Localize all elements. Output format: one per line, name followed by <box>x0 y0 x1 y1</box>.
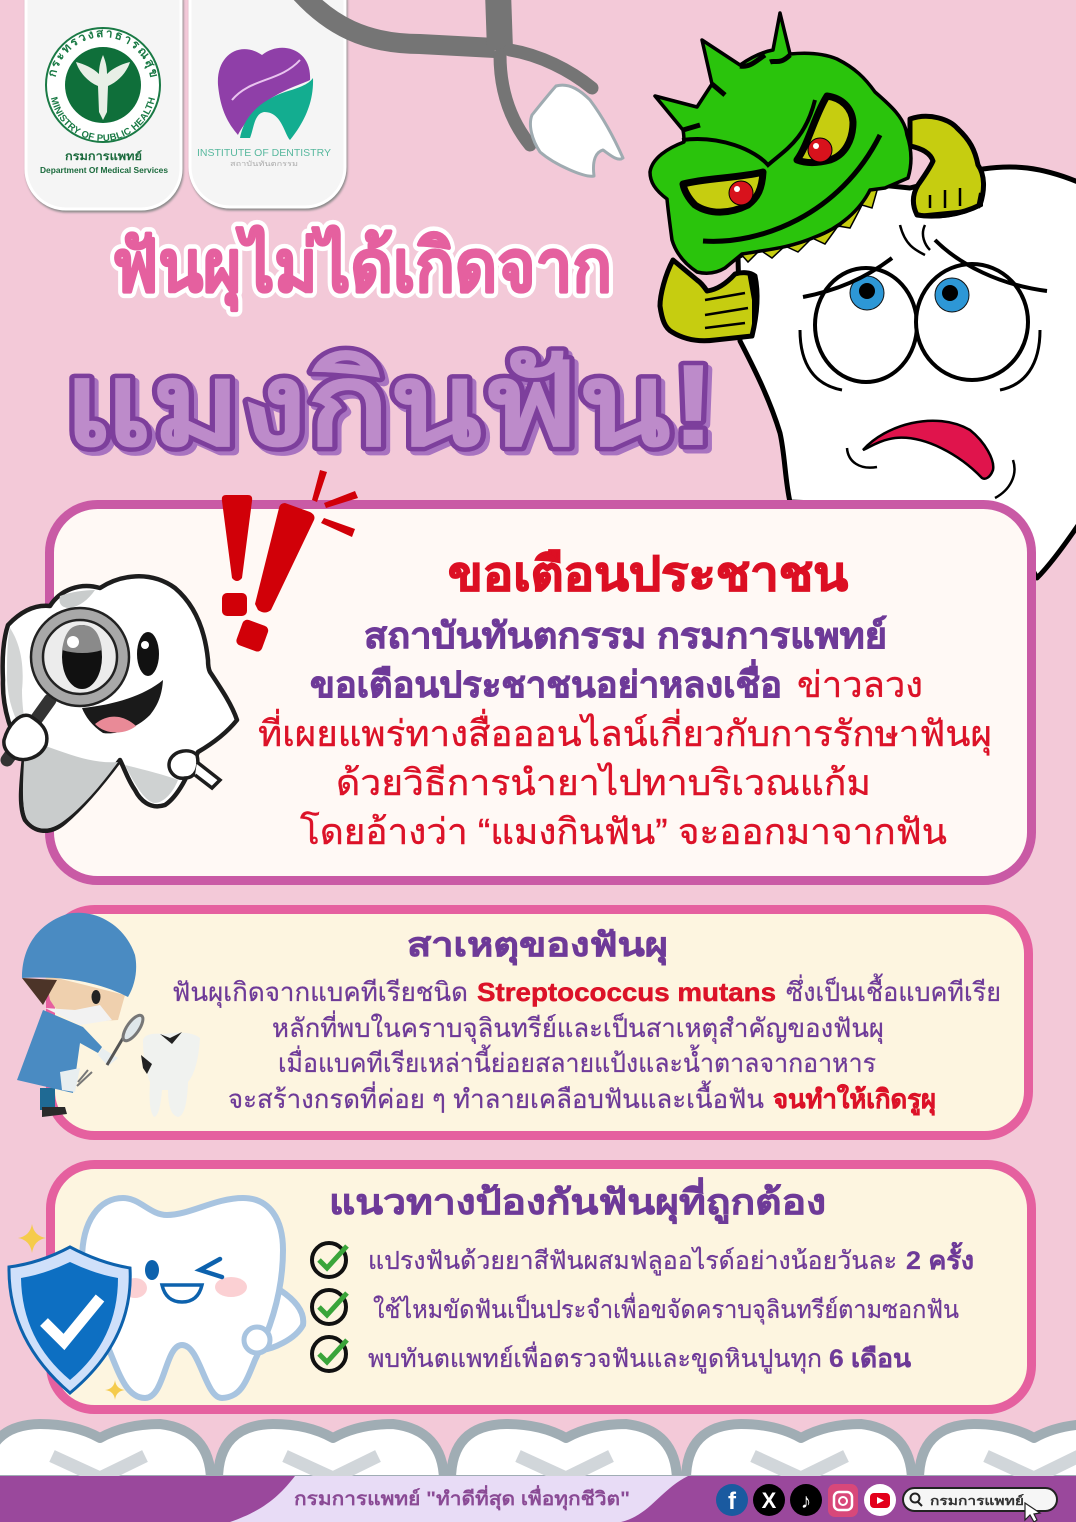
cause text block: ฟันผุเกิดจากแบคทีเรียชนิด <box>172 977 468 1008</box>
panel: prevention <box>50 1164 1032 1410</box>
panel: public warning <box>50 504 1032 880</box>
warning text block: ข่าวลวง <box>797 664 923 705</box>
list: prevention items <box>312 1241 974 1374</box>
cause text block: Streptococcus mutans <box>477 977 776 1007</box>
cause text block: ซึ่งเป็นเชื้อแบคทีเรีย <box>786 973 1001 1007</box>
social icons: f <box>728 1488 737 1515</box>
warning text block: สถาบันทันตกรรม กรมการแพทย์ <box>364 615 887 656</box>
icon: sparkle small <box>105 1380 125 1400</box>
heading: cause: สาเหตุของฟันผุ <box>407 926 668 966</box>
title line 1: ฟันผุไม่ได้เกิดจาก <box>112 224 612 312</box>
cause text block <box>172 973 1001 1116</box>
title line 2 with shadow: แมงกินฟัน! <box>68 344 720 474</box>
list: prevention items: แปรงฟันด้วยยาสีฟันผสมฟลูออไรด์อย่างน้อยวันละ <box>368 1246 897 1276</box>
logo card: Department of Medical Services: กระทรวงสาธารณสุข <box>49 30 158 78</box>
illustration: worried tooth <box>738 167 1076 578</box>
title line 2 with shadow: แมงกินฟัน! <box>64 340 716 470</box>
heading: warning: ขอเตือนประชาชน <box>448 547 848 600</box>
illustration: winking tooth with shield <box>9 1198 303 1398</box>
panel: cause of cavities <box>50 910 1028 1136</box>
illustration: tooth with magnifying glass <box>3 576 237 831</box>
search box: กรมการแพทย์ <box>930 1494 1024 1508</box>
logo card: Department of Medical Services: กรมการแพทย์ <box>65 150 142 163</box>
icon: sparkle large <box>18 1224 46 1253</box>
list: prevention items: 2 ครั้ง <box>906 1241 974 1275</box>
social icons: X <box>762 1488 777 1513</box>
decorative tooth strip <box>0 1424 1076 1480</box>
icon: forceps pulling tooth <box>300 0 623 176</box>
warning text block: ที่เผยแพร่ทางสื่อออนไลน์เกี่ยวกับการรักษาฟันผุ <box>258 709 992 756</box>
cause text block: จนทำให้เกิดรูผุ <box>773 1084 936 1116</box>
icon: check 1 <box>312 1243 347 1277</box>
social icons: ♪ <box>801 1490 811 1513</box>
search box <box>903 1488 1057 1522</box>
warning text block: ด้วยวิธีการนำยาไปทาบริเวณแก้ม <box>336 762 871 803</box>
list: prevention items: พบทันตแพทย์เพื่อตรวจฟันและขูดหินปูนทุก <box>368 1341 822 1374</box>
illustration: dentist examining decayed tooth <box>17 913 200 1117</box>
icon: red exclamation marks <box>222 470 358 653</box>
footer slogan: กรมการแพทย์ "ทำดีที่สุด เพื่อทุกชีวิต" <box>294 1485 630 1511</box>
heading: prevention: แนวทางป้องกันฟันผุที่ถูกต้อง <box>329 1177 826 1224</box>
list: prevention items: 6 เดือน <box>829 1345 911 1373</box>
footer bar <box>0 1476 1076 1522</box>
icon: check 3 <box>312 1337 347 1371</box>
social icons <box>716 1484 896 1517</box>
logo card: Department of Medical Services: MINISTRY OF PUBLIC HEALTH <box>50 96 155 141</box>
list: prevention items: ใช้ไหมขัดฟันเป็นประจำเพื่อขจัดคราบจุลินทรีย์ตามซอกฟัน <box>373 1292 959 1325</box>
title line 1: ฟันผุไม่ได้เกิดจาก <box>112 224 612 312</box>
illustration: green cavity monster <box>650 13 984 341</box>
warning text block <box>258 615 992 852</box>
title line 2 with shadow: แมงกินฟัน! <box>64 340 716 470</box>
cause text block: เมื่อแบคทีเรียเหล่านี้ย่อยสลายแป้งและน้ำตาลจากอาหาร <box>278 1044 876 1078</box>
logo card: Department of Medical Services <box>24 0 185 214</box>
warning text block: โดยอ้างว่า “แมงกินฟัน” จะออกมาจากฟัน <box>300 811 947 852</box>
warning text block: ขอเตือนประชาชนอย่าหลงเชื่อ <box>310 659 782 705</box>
logo card: Department of Medical Services: Department Of Medical Services <box>40 165 168 175</box>
cause text block: จะสร้างกรดที่ค่อย ๆ ทำลายเคลือบฟันและเนื้อฟัน <box>228 1080 764 1114</box>
logo card: Institute of Dentistry <box>190 0 345 207</box>
logo card: Institute of Dentistry: สถาบันทันตกรรม <box>230 160 298 168</box>
icon: check 2 <box>312 1290 347 1324</box>
logo card: Institute of Dentistry: INSTITUTE OF DENTISTRY <box>197 147 331 159</box>
cause text block: หลักที่พบในคราบจุลินทรีย์และเป็นสาเหตุสำคัญของฟันผุ <box>272 1010 884 1044</box>
